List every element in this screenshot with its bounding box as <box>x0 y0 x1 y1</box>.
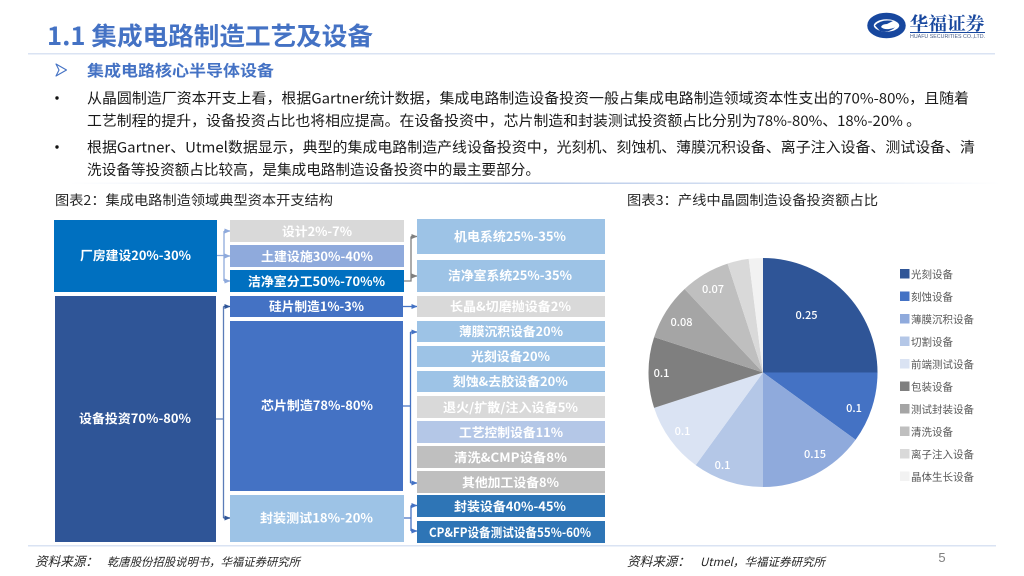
text block: bullet points: 洗设备等投资额占比较高，是集成电路制造设备投资中的最主要部分。 <box>87 159 540 180</box>
logo: Huafu Securities <box>870 10 985 40</box>
box: civil works <box>230 245 404 267</box>
box: cleanroom system <box>417 260 605 292</box>
box: design: 设计2%-7% <box>282 221 352 240</box>
box: CP and FP test equipment: CP&FP设备测试设备55%-60% <box>429 522 591 541</box>
box: chip manufacturing: 芯片制造78%-80% <box>261 395 373 414</box>
box: chip manufacturing <box>230 321 403 491</box>
box: electromechanical: 机电系统25%-35% <box>454 226 566 245</box>
box: design <box>230 220 404 242</box>
box: thin film: 薄膜沉积设备20% <box>459 321 563 340</box>
box: electromechanical <box>417 219 605 254</box>
arrows: connectors <box>216 231 417 531</box>
logo: Huafu Securities: 华福证券 <box>910 10 984 36</box>
source note: left: 乾唐股份招股说明书，华福证券研究所 <box>107 554 301 570</box>
legend: 清洗设备 <box>911 424 953 440</box>
legend: 离子注入设备 <box>911 447 974 462</box>
title: 1.1 集成电路制造工艺及设备 <box>47 17 373 53</box>
box: cleanroom works: 洁净室分工50%-70%% <box>248 271 385 290</box>
pie labels: 0.1 <box>846 400 862 416</box>
box: other processing <box>417 471 605 493</box>
text block: bullet points: 从晶圆制造厂资本开支上看，根据Gartner统计数据，集成电路制造设备投资一般占集成电路制造领域资本性支出的70%-80%，且随着 <box>87 88 969 108</box>
box: civil works: 土建设施30%-40% <box>261 246 373 265</box>
legend: 晶体生长设备 <box>911 470 974 484</box>
box: wafer manufacturing: 硅片制造1%-3% <box>269 296 364 315</box>
heading: figure 3: 图表3：产线中晶圆制造设备投资额占比 <box>627 189 878 209</box>
pie labels: 0.25 <box>795 307 818 323</box>
box: wafer manufacturing <box>230 296 403 317</box>
box: process control: 工艺控制设备11% <box>459 422 563 441</box>
box: equipment investment <box>55 296 216 542</box>
box: process control <box>417 421 605 443</box>
source note: left <box>35 551 301 570</box>
source note: right: Utmel，华福证券研究所 <box>700 554 826 570</box>
box: cleaning and CMP: 清洗&CMP设备8% <box>454 447 567 466</box>
pie labels: 0.1 <box>654 365 669 381</box>
legend: 切割设备 <box>911 334 953 350</box>
legend: 薄膜沉积设备 <box>911 312 974 327</box>
box: lithography: 光刻设备20% <box>471 346 550 365</box>
box: equipment investment: 设备投资70%-80% <box>79 408 191 427</box>
box: packaging equipment <box>417 495 605 517</box>
box: anneal diffusion implant: 退火/扩散/注入设备5% <box>443 397 578 416</box>
box: cleaning and CMP <box>417 446 605 468</box>
pie labels: 0.07 <box>702 281 724 297</box>
box: other processing: 其他加工设备8% <box>462 472 559 491</box>
box: packaging and test <box>230 495 404 542</box>
box: thin film <box>417 321 605 342</box>
legend <box>900 267 974 484</box>
legend: 光刻设备 <box>911 267 953 282</box>
source note: right <box>627 551 826 570</box>
source note: left: 资料来源： <box>35 551 98 570</box>
box: etching: 刻蚀&去胶设备20% <box>453 371 568 390</box>
page number: 5 <box>938 550 946 565</box>
text block: bullet points: 根据Gartner、Utmel数据显示，典型的集成电路制造产线设备投资中，光刻机、刻蚀机、薄膜沉积设备、离子注入设备、测试设备、清 <box>87 136 975 158</box>
box: packaging equipment: 封装设备40%-45% <box>454 496 566 515</box>
legend: 包装设备 <box>911 380 953 394</box>
legend: 测试封装设备 <box>911 402 974 417</box>
pie labels: 0.08 <box>670 314 693 330</box>
legend: 刻蚀设备 <box>911 290 953 304</box>
text block: bullet points <box>55 88 975 180</box>
source note: right: 资料来源： <box>627 551 690 570</box>
legend: 前端测试设备 <box>911 357 974 372</box>
pie chart: wafer fab equipment share <box>648 258 878 487</box>
box: etching <box>417 371 605 392</box>
box: lithography <box>417 346 605 367</box>
sub heading: 集成电路核心半导体设备 <box>87 59 275 81</box>
box: cleanroom system: 洁净室系统25%-35% <box>448 265 572 284</box>
box: anneal diffusion implant <box>417 396 605 418</box>
pie labels <box>654 281 862 473</box>
box: plant construction: 厂房建设20%-30% <box>80 245 191 264</box>
box: crystal growth: 长晶&切磨抛设备2% <box>450 296 571 315</box>
text block: bullet points: 工艺制程的提升，设备投资占比也将相应提高。在设备投资中，芯片制造和封装测试投资额占比分别为78%-80%、18%-20% 。 <box>87 110 921 131</box>
heading: figure 2: 图表2：集成电路制造领域典型资本开支结构 <box>55 189 333 209</box>
pie labels: 0.1 <box>715 457 730 473</box>
pie labels: 0.1 <box>675 423 690 439</box>
logo: Huafu Securities: HUAFU SECURITIES CO.,LTD. <box>910 34 985 40</box>
pie labels: 0.15 <box>804 446 826 462</box>
box: crystal growth <box>417 296 605 317</box>
box: cleanroom works <box>230 270 404 292</box>
box: plant construction <box>54 220 217 292</box>
flow chart: capital expenditure structure <box>54 219 605 543</box>
box: packaging and test: 封装测试18%-20% <box>260 508 373 526</box>
